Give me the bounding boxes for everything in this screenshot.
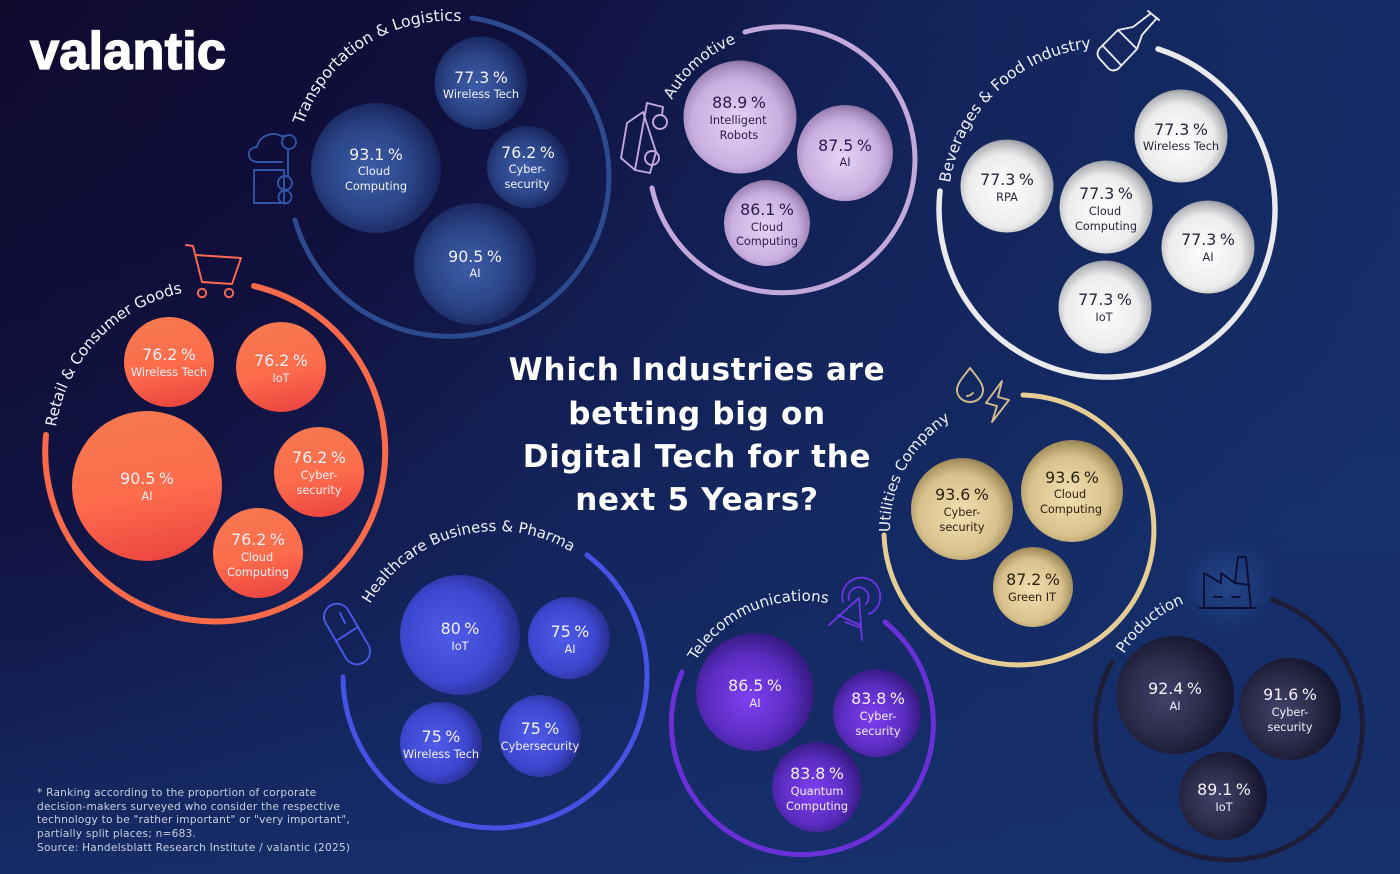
ring: production	[1095, 600, 1362, 860]
sphere: AI 87.5	[797, 105, 893, 201]
sphere: IoT 80	[400, 575, 520, 695]
sphere: cloud computing 76.2: 76.2 %	[231, 530, 285, 549]
sphere: cloud computing 76.2	[213, 508, 303, 598]
sphere: IoT 89.1	[1179, 752, 1267, 840]
sphere: AI 90.5	[72, 411, 222, 561]
icon: cloud and box network	[249, 134, 296, 204]
sphere: AI 92.4: AI	[1169, 700, 1181, 713]
panel: Transportation & Logistics	[248, 9, 612, 339]
title	[509, 352, 885, 518]
panel: Beverages & Food Industry	[936, 10, 1278, 380]
label: utilities: Utilities Company	[879, 414, 948, 531]
sphere: cloud computing 93.6: 93.6 %	[1045, 468, 1099, 487]
footnote: decision-makers surveyed who consider the respective	[37, 801, 340, 813]
label: healthcare: Healthcare Business & Pharma	[361, 520, 574, 603]
sphere: wireless tech 76.2: Wireless Tech	[131, 366, 207, 379]
sphere: intelligent robots 88.9: Intelligent	[710, 114, 767, 127]
sphere: AI 86.5: 86.5 %	[728, 676, 782, 695]
sphere: cloud computing 93.6: Computing	[1040, 503, 1102, 516]
footnote: Source: Handelsblatt Research Institute / valantic (2025)	[37, 842, 350, 854]
label: telecommunications: Telecommunications	[686, 589, 828, 658]
sphere: cloud computing 86.1: Computing	[736, 235, 798, 248]
sphere: AI 90.5: AI	[141, 490, 153, 503]
sphere: IoT 89.1: 89.1 %	[1197, 780, 1251, 799]
sphere: IoT 89.1: IoT	[1215, 801, 1233, 814]
sphere: cybersecurity 91.6: security	[1267, 721, 1313, 734]
sphere: wireless tech 75: Wireless Tech	[403, 748, 479, 761]
icon: factory	[1199, 557, 1256, 608]
title: betting big on	[568, 396, 826, 432]
icon: drop and bolt	[957, 368, 1009, 422]
sphere: cybersecurity 76.2: security	[296, 484, 342, 497]
sphere: green IT 87.2	[993, 547, 1073, 627]
footnote: * Ranking according to the proportion of corporate	[37, 787, 316, 799]
logo: valantic: valantic	[30, 22, 226, 81]
sphere: IoT 80: IoT	[451, 640, 469, 653]
sphere: AI 86.5: AI	[749, 697, 761, 710]
sphere: cloud computing 86.1: Cloud	[751, 221, 783, 234]
panel: Telecommunications	[668, 576, 936, 858]
title: Digital Tech for the	[523, 439, 871, 475]
ring: beverages	[939, 49, 1275, 377]
label: retail: Retail & Consumer Goods	[45, 284, 182, 426]
label: automotive: Automotive	[664, 36, 736, 100]
sphere: cloud computing 93.1	[311, 103, 441, 233]
sphere: cybersecurity 93.6: Cyber-	[944, 506, 980, 519]
panel: Automotive	[620, 24, 918, 296]
sphere: green IT 87.2: Green IT	[1008, 591, 1056, 604]
sphere: cybersecurity 93.6: security	[939, 521, 985, 534]
panel: Utilities Company	[879, 367, 1156, 668]
sphere: cybersecurity 93.6	[911, 458, 1013, 560]
sphere: wireless tech 75: 75 %	[422, 727, 460, 746]
footnote	[37, 787, 350, 854]
sphere: AI 77.3: 77.3 %	[1181, 230, 1235, 249]
panel: Retail & Consumer Goods	[42, 244, 388, 624]
sphere: cybersecurity 76.2: 76.2 %	[501, 143, 555, 162]
ring: utilities	[884, 395, 1154, 665]
ring: automotive	[652, 27, 915, 293]
ring: healthcare	[343, 555, 647, 828]
sphere: cloud computing 77.3: Computing	[1075, 220, 1137, 233]
footnote: partially split places; n=683.	[37, 828, 196, 840]
sphere: cloud computing 77.3: Cloud	[1089, 205, 1121, 218]
sphere: AI 75	[528, 597, 610, 679]
sphere: intelligent robots 88.9: Robots	[720, 129, 758, 142]
sphere: AI 90.5: 90.5 %	[120, 469, 174, 488]
sphere: wireless tech 76.2: 76.2 %	[142, 345, 196, 364]
sphere: cybersecurity 75: Cybersecurity	[501, 740, 580, 753]
sphere: AI 75: AI	[564, 643, 576, 656]
sphere: cloud computing 93.1: Computing	[345, 180, 407, 193]
sphere: cybersecurity 76.2: Cyber-	[301, 469, 337, 482]
sphere: wireless tech 77.3	[1134, 90, 1228, 182]
sphere: wireless tech 77.3	[434, 36, 528, 130]
sphere: wireless tech 77.3: 77.3 %	[454, 68, 508, 87]
sphere: cloud computing 93.6: Cloud	[1054, 488, 1086, 501]
sphere: AI 92.4: 92.4 %	[1148, 679, 1202, 698]
sphere: cloud computing 77.3: 77.3 %	[1079, 184, 1133, 203]
sphere: cybersecurity 76.2: 76.2 %	[292, 448, 346, 467]
sphere: quantum computing 83.8: Computing	[786, 800, 848, 813]
label: production: Production	[1116, 597, 1183, 653]
sphere: cloud computing 86.1	[724, 180, 810, 266]
sphere: IoT 77.3: 77.3 %	[1078, 290, 1132, 309]
sphere: AI 87.5: AI	[839, 156, 851, 169]
sphere: cybersecurity 75	[499, 695, 581, 777]
sphere: cybersecurity 76.2: security	[504, 178, 550, 191]
sphere: AI 90.5: 90.5 %	[448, 247, 502, 266]
icon: shopping cart	[186, 245, 241, 297]
sphere: cybersecurity 83.8: Cyber-	[860, 710, 896, 723]
sphere: cloud computing 93.6	[1021, 440, 1123, 542]
sphere: cybersecurity 91.6	[1239, 658, 1341, 760]
sphere: green IT 87.2: 87.2 %	[1006, 570, 1060, 589]
sphere: wireless tech 77.3: Wireless Tech	[443, 88, 519, 101]
sphere: IoT 77.3: IoT	[1095, 311, 1113, 324]
sphere: AI 90.5	[414, 203, 536, 325]
sphere: cloud computing 76.2: Computing	[227, 566, 289, 579]
panel: Healthcare Business & Pharma	[323, 520, 650, 830]
sphere: quantum computing 83.8: Quantum	[791, 785, 843, 798]
ring: retail	[45, 286, 385, 622]
sphere: quantum computing 83.8: 83.8 %	[790, 764, 844, 783]
sphere: wireless tech 76.2	[124, 317, 214, 407]
sphere: IoT 80: 80 %	[441, 619, 479, 638]
sphere: IoT 76.2	[236, 322, 326, 412]
sphere: cloud computing 93.1: Cloud	[358, 165, 390, 178]
sphere: cloud computing 86.1: 86.1 %	[740, 200, 794, 219]
icon: bottle	[1098, 11, 1159, 70]
sphere: cybersecurity 76.2	[274, 427, 364, 517]
sphere: cybersecurity 93.6: 93.6 %	[935, 485, 989, 504]
sphere: quantum computing 83.8	[772, 742, 862, 832]
sphere: IoT 76.2: 76.2 %	[254, 351, 308, 370]
sphere: cybersecurity 83.8: 83.8 %	[851, 689, 905, 708]
sphere: IoT 77.3	[1058, 260, 1152, 354]
sphere: cybersecurity 76.2	[487, 126, 569, 208]
ring: transportation	[295, 18, 609, 336]
sphere: intelligent robots 88.9: 88.9 %	[712, 93, 766, 112]
label: transportation: Transportation & Logistics	[292, 9, 460, 122]
ring: telecommunications	[671, 622, 933, 855]
sphere: AI 87.5: 87.5 %	[818, 136, 872, 155]
sphere: RPA 77.3: 77.3 %	[980, 170, 1034, 189]
sphere: AI 92.4	[1116, 636, 1234, 754]
sphere: AI 77.3	[1162, 200, 1254, 294]
sphere: cybersecurity 91.6: Cyber-	[1272, 706, 1308, 719]
sphere: AI 75: 75 %	[551, 622, 589, 641]
label: beverages: Beverages & Food Industry	[939, 40, 1090, 182]
sphere: wireless tech 77.3: 77.3 %	[1154, 120, 1208, 139]
footnote: technology to be "rather important" or "very important",	[37, 814, 350, 826]
sphere: AI 77.3: AI	[1202, 251, 1214, 264]
sphere: cybersecurity 75: 75 %	[521, 719, 559, 738]
sphere: RPA 77.3	[960, 140, 1054, 232]
sphere: cybersecurity 83.8	[833, 669, 921, 757]
sphere: IoT 76.2: IoT	[272, 372, 290, 385]
sphere: cybersecurity 76.2: Cyber-	[509, 163, 545, 176]
sphere: AI 86.5	[696, 633, 814, 751]
icon: car	[621, 103, 667, 173]
sphere: cloud computing 76.2: Cloud	[241, 551, 273, 564]
sphere: cybersecurity 91.6: 91.6 %	[1263, 685, 1317, 704]
panel: Production	[1093, 556, 1365, 862]
sphere: cybersecurity 83.8: security	[855, 725, 901, 738]
title: next 5 Years?	[575, 482, 819, 518]
icon: antenna	[829, 578, 880, 640]
icon: pill	[319, 599, 375, 669]
title: Which Industries are	[509, 352, 885, 388]
sphere: wireless tech 77.3: Wireless Tech	[1143, 140, 1219, 153]
sphere: RPA 77.3: RPA	[996, 191, 1018, 204]
sphere: cloud computing 93.1: 93.1 %	[349, 145, 403, 164]
sphere: wireless tech 75	[400, 702, 482, 784]
sphere: cloud computing 77.3	[1060, 160, 1152, 254]
sphere: intelligent robots 88.9	[684, 60, 796, 174]
sphere: AI 90.5: AI	[469, 267, 481, 280]
